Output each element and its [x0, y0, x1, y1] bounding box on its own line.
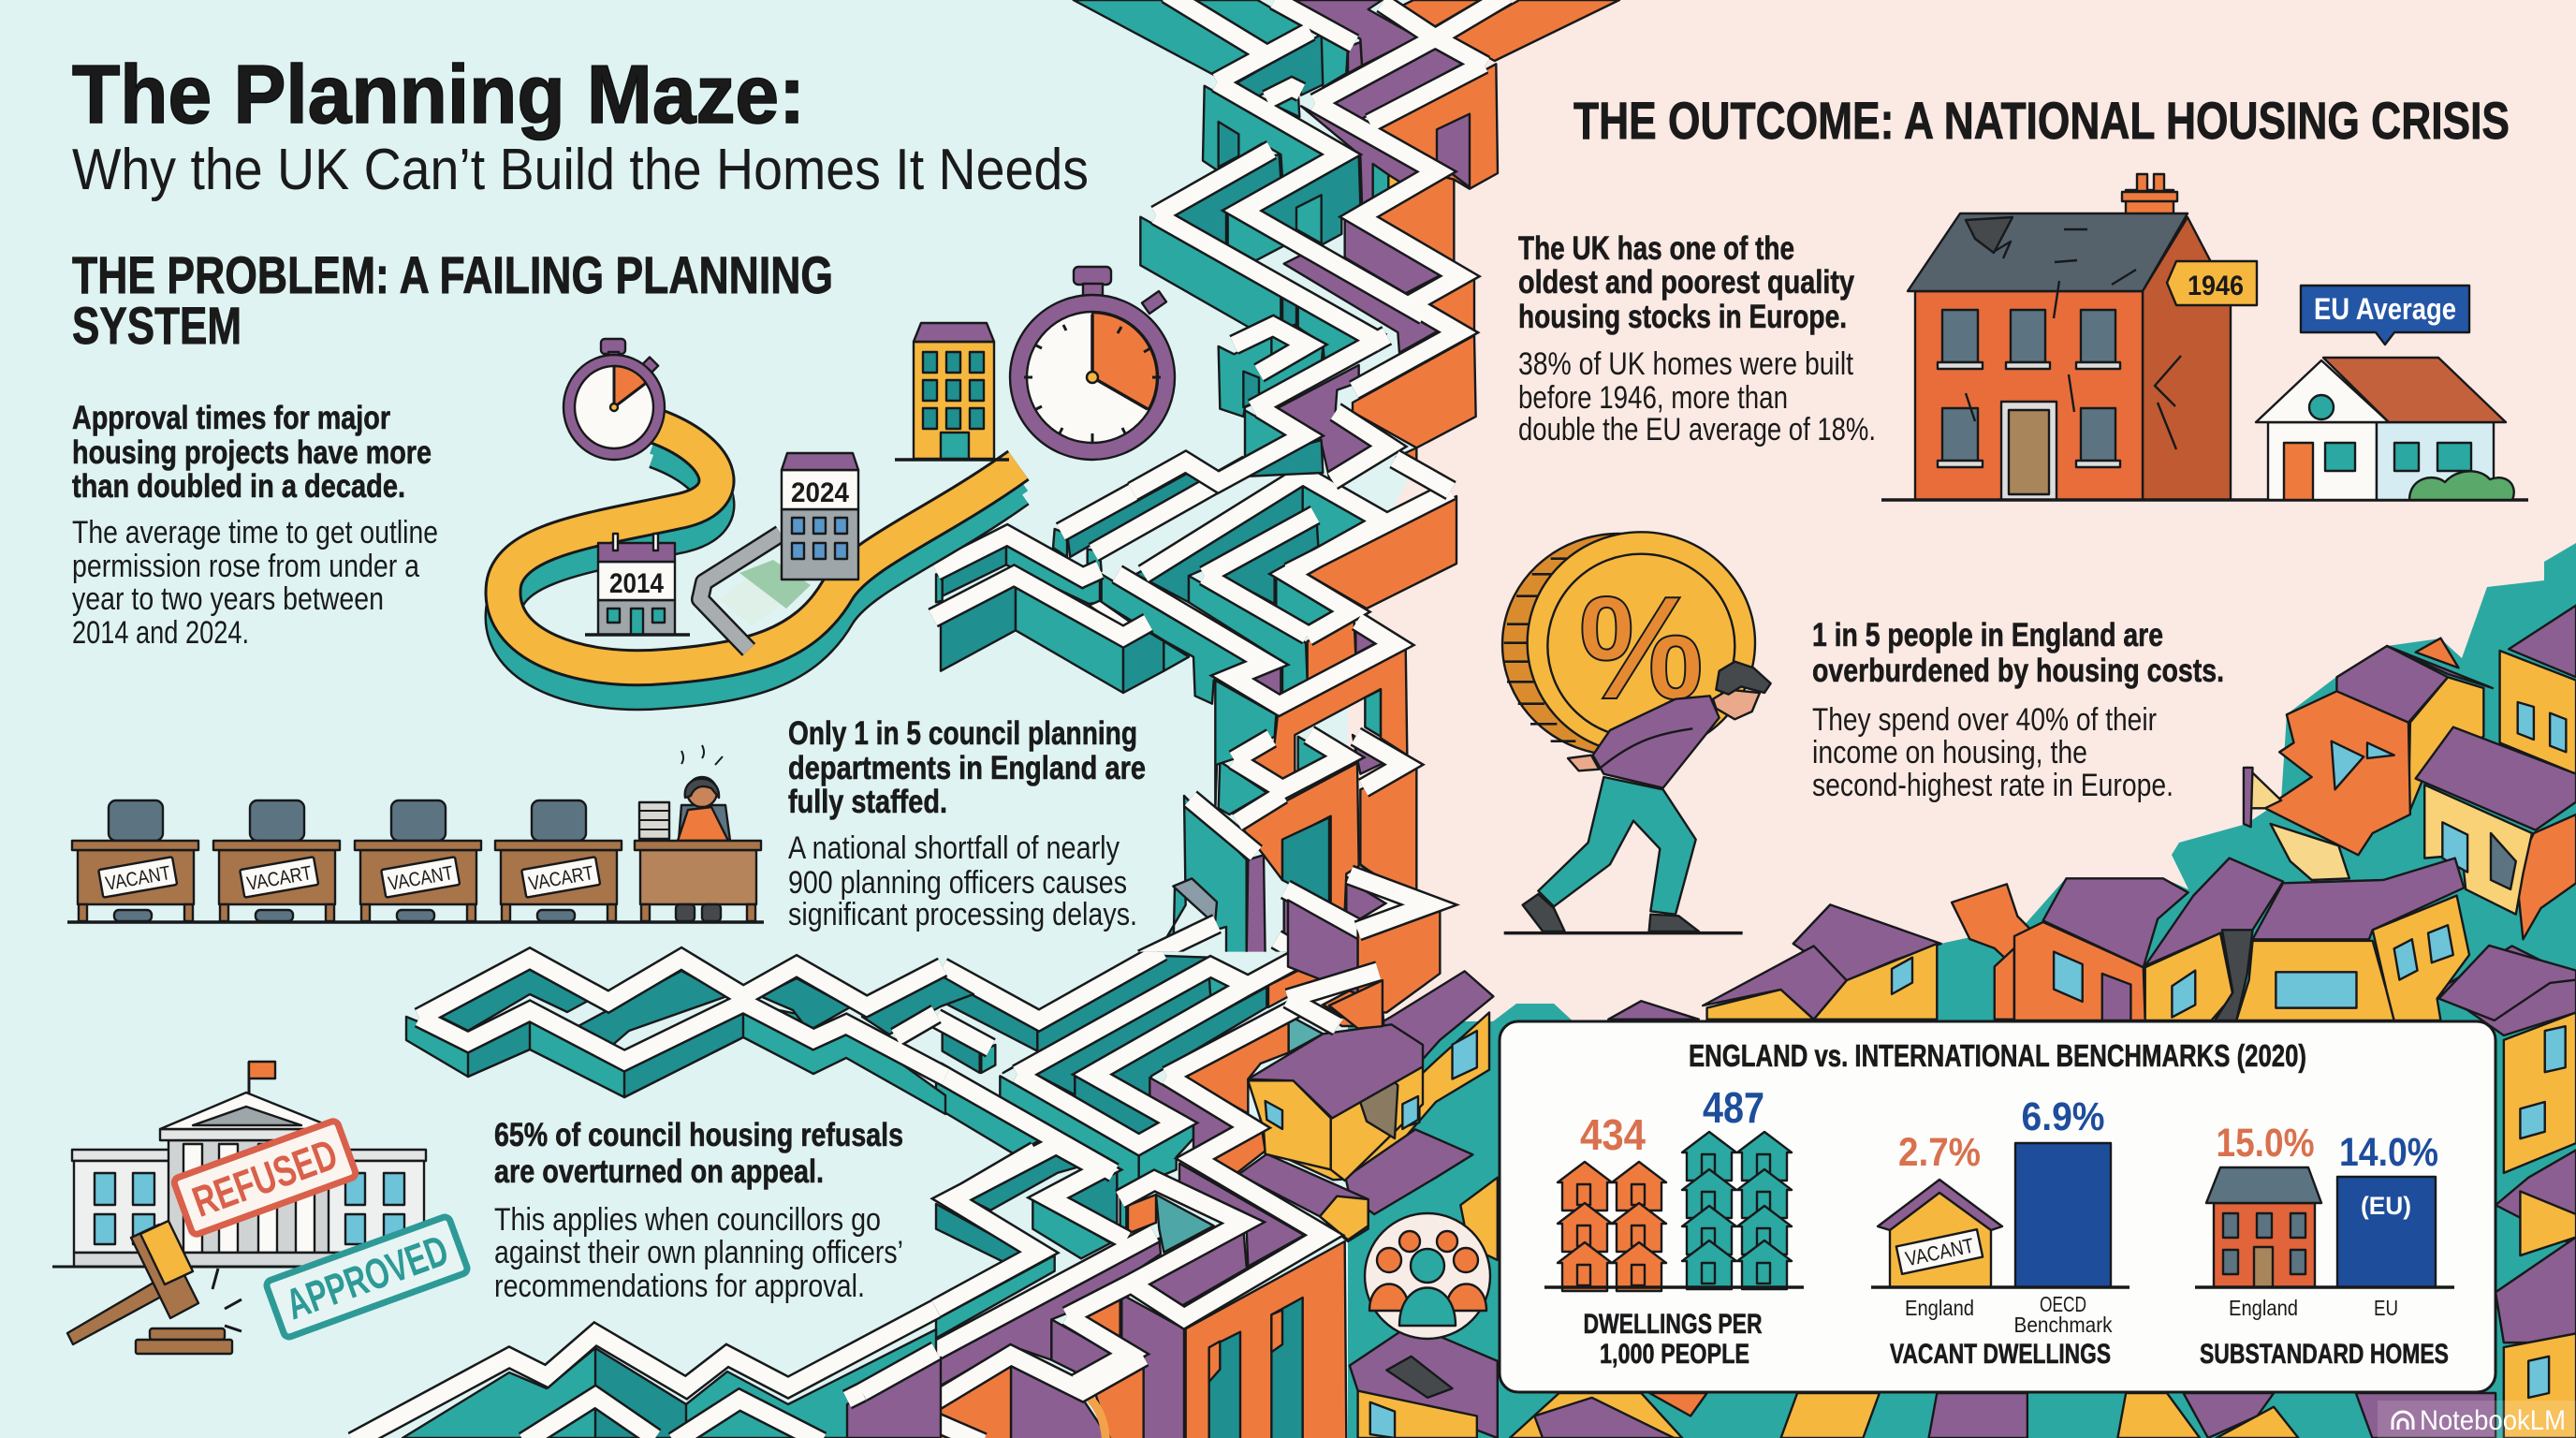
man: [1504, 662, 1771, 933]
lower and side houses: [1288, 884, 2576, 1438]
maze: middle section: [933, 465, 1456, 960]
text block: refusals: against their own planning officers’: [494, 1235, 903, 1270]
text block: refusals: recommendations for approval.: [494, 1269, 865, 1304]
maze: right lower blocks: [1288, 875, 1440, 1029]
text block: staffing: Only 1 in 5 council planning: [788, 715, 1137, 752]
text block: old housing stock: [1518, 230, 1876, 448]
chart: dwellings per 1,000 people: [1544, 1083, 1804, 1370]
text block: refusals: [494, 1117, 903, 1304]
text block: old housing stock: double the EU average of 18%.: [1518, 412, 1876, 448]
chart: vacant dwellings: [1871, 1094, 2130, 1370]
text block: approval times: than doubled in a decade.: [72, 468, 405, 505]
tag: EU average: EU Average: [2314, 292, 2456, 326]
heading: the problem: [72, 245, 833, 355]
vacant desks row: [67, 800, 764, 922]
text block: old housing stock: oldest and poorest quality: [1518, 264, 1854, 301]
chart: substandard homes: [2195, 1121, 2454, 1370]
coin: [1502, 532, 1755, 756]
icon: community badge: [1365, 1213, 1490, 1339]
text block: housing costs: [1812, 617, 2224, 803]
yellow tower: [895, 323, 1009, 460]
chart: substandard homes: England: [2229, 1296, 2298, 1320]
chart: vacant dwellings: England: [1905, 1296, 1974, 1320]
chart: dwellings per 1,000 people: DWELLINGS PER: [1584, 1309, 1763, 1340]
upper right cluster of houses: [2014, 606, 2576, 1020]
chart: vacant dwellings: 6.9%: [2022, 1094, 2104, 1139]
old brick house: [1881, 174, 2528, 500]
text block: approval times: Approval times for major: [72, 400, 390, 436]
stamp: refused: REFUSED: [186, 1129, 344, 1226]
text block: old housing stock: before 1946, more than: [1518, 380, 1788, 416]
text block: housing costs: second-highest rate in Europe.: [1812, 768, 2174, 803]
desk 3: [355, 800, 481, 921]
2024 building: 2024: [791, 477, 849, 508]
text block: housing costs: They spend over 40% of their: [1812, 702, 2157, 738]
maze: bottom left arm: [353, 1309, 941, 1438]
heading: the problem: SYSTEM: [72, 296, 242, 355]
2014 calendar building: [585, 534, 690, 635]
chart: dwellings per 1,000 people: 434: [1580, 1110, 1646, 1159]
chart: substandard homes: (EU): [2361, 1192, 2411, 1220]
watermark: NotebookLM: [2420, 1405, 2566, 1436]
chart: dwellings per 1,000 people: 487: [1703, 1083, 1764, 1132]
chart: vacant dwellings: VACANT DWELLINGS: [1890, 1339, 2111, 1370]
tag: 1946: 1946: [2188, 271, 2244, 301]
tag: 1946: [2167, 261, 2257, 305]
small stopwatch: [564, 339, 665, 460]
town of crumbling houses: [1288, 543, 2576, 1438]
chart: vacant dwellings: VACANT: [1903, 1234, 1976, 1270]
text block: staffing: [788, 715, 1146, 932]
broken road patch: [700, 534, 811, 650]
chart: substandard homes: EU: [2374, 1296, 2398, 1320]
text block: approval times: 2014 and 2024.: [72, 615, 249, 651]
text block: staffing: departments in England are: [788, 750, 1146, 786]
large stopwatch: [1010, 267, 1175, 460]
title: The Planning Maze:: [72, 48, 805, 140]
staffed desk with stressed officer: [635, 745, 761, 921]
maze: lower section: [936, 946, 1423, 1438]
2024 building: [782, 453, 858, 580]
maze: upper section: [1074, 0, 1619, 492]
desk 4: [495, 800, 622, 921]
text block: old housing stock: housing stocks in Europe.: [1518, 299, 1847, 335]
gavel: [67, 1221, 242, 1354]
text block: staffing: A national shortfall of nearly: [788, 830, 1120, 866]
chart: vacant dwellings: OECD: [2040, 1292, 2086, 1316]
desk 3: VACANT: [387, 862, 455, 895]
2014 calendar building: 2014: [609, 568, 664, 599]
modern house: [2256, 358, 2514, 500]
title: Why the UK Can’t Build the Homes It Needs: [72, 138, 1089, 202]
text block: approval times: permission rose from under a: [72, 549, 419, 584]
desk 1: [72, 800, 198, 921]
panel title: ENGLAND vs. INTERNATIONAL BENCHMARKS (2020): [1689, 1038, 2306, 1073]
text block: approval times: The average time to get outline: [72, 515, 438, 550]
text block: housing costs: overburdened by housing costs.: [1812, 653, 2224, 689]
text block: old housing stock: 38% of UK homes were built: [1518, 346, 1853, 382]
desk 2: VACART: [245, 862, 314, 895]
council building: [52, 1062, 440, 1267]
text block: housing costs: 1 in 5 people in England are: [1812, 617, 2163, 653]
text block: approval times: [72, 400, 438, 651]
text block: staffing: 900 planning officers causes: [788, 865, 1127, 901]
coin and burdened man: [1502, 532, 1771, 933]
desk 2: [213, 800, 340, 921]
chart: substandard homes: SUBSTANDARD HOMES: [2200, 1339, 2449, 1370]
desk 1: VACANT: [104, 862, 172, 895]
tag: EU average: [2301, 286, 2469, 345]
text block: refusals: are overturned on appeal.: [494, 1153, 824, 1190]
text block: refusals: This applies when councillors go: [494, 1202, 881, 1238]
watermark: [2378, 1401, 2576, 1438]
desk 4: VACART: [527, 862, 595, 895]
text block: refusals: 65% of council housing refusals: [494, 1117, 903, 1153]
chart: vacant dwellings: 2.7%: [1898, 1130, 1981, 1175]
stamp: approved: [265, 1215, 469, 1339]
stamp: approved: APPROVED: [280, 1225, 454, 1328]
chart: substandard homes: 15.0%: [2217, 1121, 2314, 1166]
chart: substandard homes: 14.0%: [2339, 1130, 2438, 1175]
maze: left arm: [406, 959, 973, 1114]
text block: staffing: fully staffed.: [788, 784, 947, 820]
title: [72, 48, 1089, 202]
heading: the problem: THE PROBLEM: A FAILING PLANNING: [72, 245, 833, 304]
winding road from 2014 to 2024: [504, 426, 1018, 692]
panel: international benchmarks: [1500, 1021, 2496, 1392]
text block: staffing: significant processing delays.: [788, 897, 1137, 932]
stamp: refused: [173, 1120, 357, 1236]
text block: old housing stock: The UK has one of the: [1518, 230, 1794, 267]
coin: %: [1579, 566, 1704, 730]
text block: approval times: year to two years between: [72, 581, 384, 617]
text block: housing costs: income on housing, the: [1812, 735, 2087, 770]
text block: approval times: housing projects have more: [72, 434, 432, 471]
chart: vacant dwellings: Benchmark: [2014, 1313, 2113, 1337]
chart: dwellings per 1,000 people: 1,000 PEOPLE: [1600, 1339, 1749, 1370]
